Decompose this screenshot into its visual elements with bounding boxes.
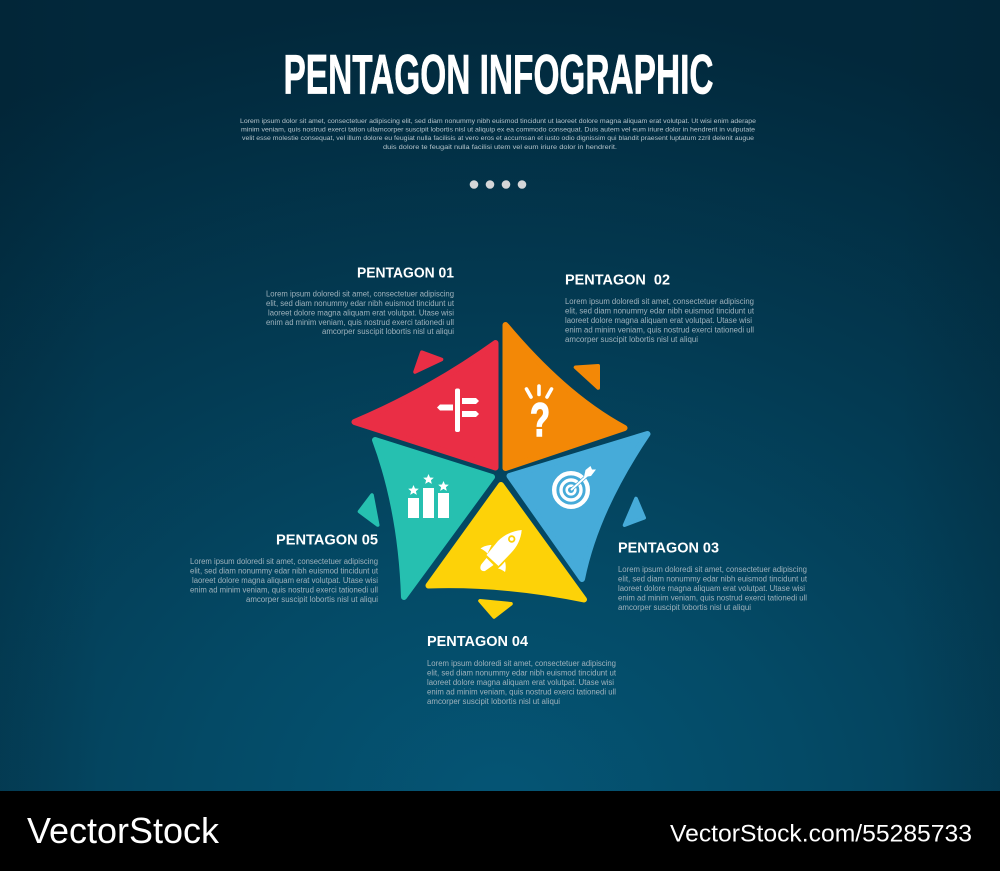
text block: pentagon 05: laoreet dolore magna aliquam erat volutpat. Utase wisi xyxy=(192,576,378,585)
text block: pentagon 03: amcorper suscipit lobortis nisl ut aliqui xyxy=(618,603,751,612)
text block: pentagon 01 xyxy=(266,290,455,336)
heading: pentagon 02: PENTAGON 02 xyxy=(565,272,670,288)
small triangle: orange xyxy=(576,366,598,388)
text block: pentagon 04: enim ad minim veniam, quis nostrud exerci tationedi ull xyxy=(427,688,616,696)
text block: pentagon 02: Lorem ipsum doloredi sit amet, consectetuer adipiscing xyxy=(565,297,754,306)
text block: pentagon 01: amcorper suscipit lobortis nisl ut aliqui xyxy=(322,327,454,336)
heading: pentagon 04: PENTAGON 04 xyxy=(427,634,528,650)
text block: pentagon 02: elit, sed diam nonummy edar nibh euismod tincidunt ut xyxy=(565,306,755,316)
text block: pentagon 01: laoreet dolore magna aliquam erat volutpat. Utase wisi xyxy=(268,308,454,318)
panel: pentagon 04 text xyxy=(427,634,617,706)
dots divider xyxy=(470,180,526,189)
small triangle: yellow xyxy=(480,601,511,617)
text block: pentagon 02 xyxy=(565,297,755,344)
text block: pentagon 02: amcorper suscipit lobortis nisl ut aliqui xyxy=(565,335,698,344)
heading: pentagon 03: PENTAGON 03 xyxy=(618,540,719,556)
icon: question mark xyxy=(526,386,552,446)
segment: red xyxy=(354,343,496,468)
icon: question mark: ? xyxy=(530,393,550,446)
small triangle: red xyxy=(415,352,442,372)
icon: signpost xyxy=(437,388,479,432)
intro paragraph: minim veniam, quis nostrud exerci tation ullamcorper suscipit lobortis nisl ut aliquip ex ea commodo consequat. Duis autem vel eum iriure dolor in hendrerit in vulputate xyxy=(241,126,755,134)
text block: pentagon 04: amcorper suscipit lobortis nisl ut aliqui xyxy=(427,697,560,706)
heading: pentagon 01: PENTAGON 01 xyxy=(357,266,454,282)
segment: yellow xyxy=(428,485,584,600)
text block: pentagon 05: Lorem ipsum doloredi sit amet, consectetuer adipiscing xyxy=(190,557,378,566)
text block: pentagon 05 xyxy=(190,557,379,604)
small triangle: blue xyxy=(624,498,644,525)
title: PENTAGON INFOGRAPHIC xyxy=(284,42,714,106)
panel: pentagon 05 text xyxy=(190,532,379,604)
icon: target xyxy=(554,466,596,507)
text block: pentagon 03: elit, sed diam nonummy edar nibh euismod tincidunt ut xyxy=(618,574,808,584)
segment: teal xyxy=(375,440,492,597)
panel: pentagon 01 text xyxy=(266,266,455,336)
footer logo: VectorStock xyxy=(27,810,220,851)
footer url: VectorStock.com/55285733 xyxy=(670,820,972,848)
text block: pentagon 03 xyxy=(618,565,808,612)
text block: pentagon 05: amcorper suscipit lobortis nisl ut aliqui xyxy=(246,595,378,604)
text block: pentagon 02: laoreet dolore magna aliquam erat volutpat. Utase wisi xyxy=(565,316,752,325)
text block: pentagon 02: enim ad minim veniam, quis nostrud exerci tationedi ull xyxy=(565,326,754,334)
intro paragraph: Lorem ipsum dolor sit amet, consectetuer adipiscing elit, sed diam nonummy nibh euismod tincidunt ut laoreet dolore magna aliquam erat volutpat. Ut wisi enim aderape xyxy=(240,118,756,125)
pentagon diagram xyxy=(354,325,648,617)
text block: pentagon 04 xyxy=(427,659,617,706)
segment: orange xyxy=(506,325,624,468)
segment: blue xyxy=(510,434,648,579)
text block: pentagon 01: Lorem ipsum doloredi sit amet, consectetuer adipiscing xyxy=(266,290,454,298)
intro paragraph: velit esse molestie consequat, vel illum dolore eu feugiat nulla facilisis at vero eros et accumsan et iusto odio dignissim qui blandit praesent luptatum zzril delenit augue xyxy=(242,135,754,142)
text block: pentagon 04: Lorem ipsum doloredi sit amet, consectetuer adipiscing xyxy=(427,659,616,668)
small triangle: teal xyxy=(360,495,378,525)
panel: pentagon 02 text xyxy=(565,272,755,344)
intro paragraph: duis dolore te feugait nulla facilisi utem vel eum iriure dolor in hendrerit. xyxy=(383,144,617,151)
text block: pentagon 03: Lorem ipsum doloredi sit amet, consectetuer adipiscing xyxy=(618,565,807,574)
icon: rocket xyxy=(480,530,522,572)
panel: pentagon 03 text xyxy=(618,540,808,612)
footer bar xyxy=(0,791,1000,871)
heading: pentagon 05: PENTAGON 05 xyxy=(276,532,378,548)
text block: pentagon 03: laoreet dolore magna aliquam erat volutpat. Utase wisi xyxy=(618,584,805,593)
text block: pentagon 05: enim ad minim veniam, quis nostrud exerci tationedi ull xyxy=(190,586,378,594)
text block: pentagon 03: enim ad minim veniam, quis nostrud exerci tationedi ull xyxy=(618,594,807,602)
icon: bar chart with stars xyxy=(408,474,449,518)
text block: pentagon 01: elit, sed diam nonummy edar nibh euismod tincidunt ut xyxy=(266,299,455,308)
intro paragraph xyxy=(240,118,756,151)
text block: pentagon 04: elit, sed diam nonummy edar nibh euismod tincidunt ut xyxy=(427,668,617,678)
text block: pentagon 01: enim ad minim veniam, quis nostrud exerci tationedi ull xyxy=(266,318,454,327)
text block: pentagon 05: elit, sed diam nonummy edar nibh euismod tincidunt ut xyxy=(190,566,379,576)
text block: pentagon 04: laoreet dolore magna aliquam erat volutpat. Utase wisi xyxy=(427,678,614,687)
